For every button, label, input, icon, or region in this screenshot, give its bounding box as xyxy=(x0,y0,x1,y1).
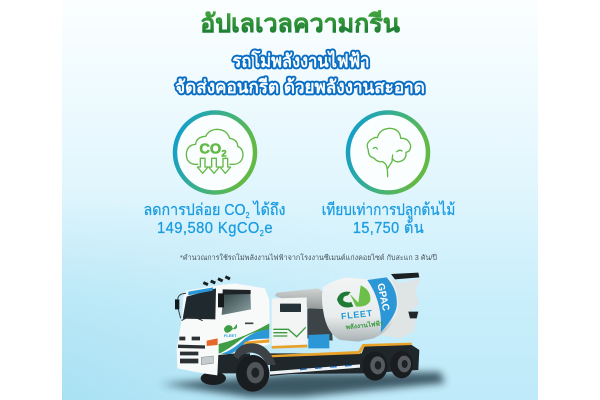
logo tagline: พลังงานไฟฟ้า xyxy=(345,318,384,331)
footnote: *คำนวณการใช้รถโม่พลังงานไฟฟ้าจากโรงงานซีเมนต์แก่งคอยไซต์ กับสะแก 3 คัน/ปี xyxy=(180,253,437,262)
windshield xyxy=(183,288,216,319)
blue band xyxy=(367,277,397,333)
swoosh blue xyxy=(221,329,269,354)
inner front wheel xyxy=(201,372,226,385)
cab body xyxy=(177,283,270,375)
side window xyxy=(222,292,251,315)
headlight xyxy=(201,356,213,365)
rear machinery xyxy=(408,312,418,318)
ground shadow xyxy=(160,372,445,397)
stat value: 2 xyxy=(260,229,264,238)
logo leaf xyxy=(337,292,353,307)
rear wheel 1 xyxy=(362,351,388,381)
swoosh green xyxy=(219,323,269,353)
truck illustration xyxy=(175,273,422,392)
subtitle line 2: จัดส่งคอนกรีต ด้วยพลังงานสะอาด xyxy=(175,77,425,97)
rear wheel 2 xyxy=(390,351,413,378)
drum EV logo xyxy=(337,285,384,331)
roof strip xyxy=(188,287,213,295)
hopper xyxy=(391,273,419,279)
stat label: ได้ถึง xyxy=(250,200,285,219)
box EV mark xyxy=(273,327,306,337)
window frame xyxy=(223,289,251,295)
front wheel xyxy=(236,355,269,392)
mirror arm xyxy=(178,293,186,318)
step and frame xyxy=(217,353,250,373)
icon: tree xyxy=(348,112,428,192)
logo V xyxy=(350,285,370,307)
icon: CO2 reduction xyxy=(175,112,255,192)
indicator xyxy=(207,338,218,346)
stat value: 149,580 KgCO xyxy=(157,219,260,237)
subtitle line 1: รถโม่พลังงานไฟฟ้า xyxy=(233,49,369,71)
tank xyxy=(275,288,327,311)
ring xyxy=(175,112,255,192)
box stripe xyxy=(272,345,307,349)
blue battery xyxy=(308,334,329,348)
band label: GPAC xyxy=(374,282,391,312)
stat: CO2 reduction xyxy=(144,200,285,238)
door handle xyxy=(245,321,253,326)
equipment xyxy=(307,308,333,341)
box window xyxy=(280,304,301,312)
door logo: FLEET xyxy=(224,333,237,338)
stat label: เทียบเท่าการปลูกต้นไม้ xyxy=(322,200,455,219)
rear box xyxy=(272,297,307,346)
mixer drum xyxy=(322,277,398,342)
stat value: e xyxy=(264,219,273,237)
tree crown and trunk xyxy=(367,128,411,177)
grille xyxy=(178,337,205,363)
logo text: FLEET xyxy=(340,308,373,321)
chassis xyxy=(270,345,419,376)
ring xyxy=(348,112,428,192)
swoosh orange xyxy=(244,339,269,344)
stat: trees xyxy=(322,200,455,237)
title: อัปเลเวลความกรีน xyxy=(200,10,400,38)
truck cab xyxy=(175,277,276,392)
wiper xyxy=(182,317,203,321)
side guard xyxy=(270,364,360,375)
background panel xyxy=(62,0,538,400)
co2 label: 2 xyxy=(221,148,227,158)
infographic xyxy=(62,10,538,400)
orange stripe xyxy=(270,343,412,357)
roof lights xyxy=(203,277,230,285)
stat value: 15,750 ต้น xyxy=(353,219,424,237)
cloud and arrows xyxy=(186,129,243,173)
stat label: 2 xyxy=(246,211,250,220)
truck rear section xyxy=(270,273,422,381)
mirrors xyxy=(175,293,224,309)
drum rear cone xyxy=(380,278,422,338)
stat label: ลดการปล่อย CO xyxy=(144,201,246,219)
wheel arch xyxy=(233,343,276,365)
co2 label: CO xyxy=(199,142,221,158)
guard dashes xyxy=(300,365,352,370)
